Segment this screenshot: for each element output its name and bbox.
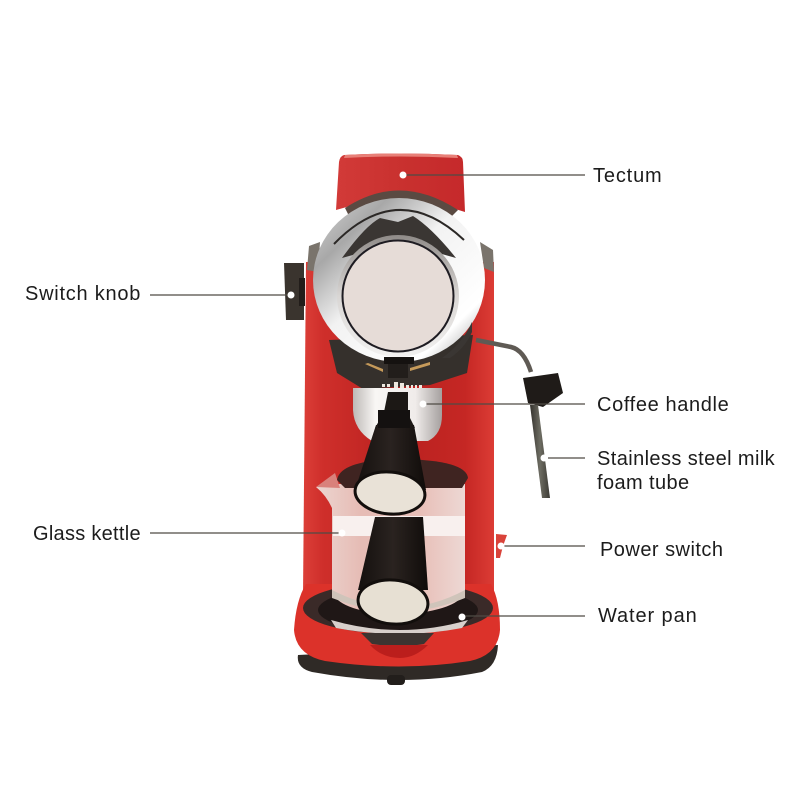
- label: water pan: Water pan: [598, 605, 698, 627]
- label: glass kettle: Glass kettle: [33, 523, 141, 545]
- glass kettle: [316, 459, 468, 615]
- label: stainless steel milk foam tube: foam tube: [597, 472, 690, 494]
- callout lines: [150, 175, 585, 616]
- foam tube grip: [523, 373, 563, 407]
- label: coffee handle: Coffee handle: [597, 394, 729, 416]
- lower handle: [356, 517, 430, 627]
- black base under ring: [329, 335, 473, 389]
- label: tectum: Tectum: [593, 165, 663, 187]
- water pan: [294, 582, 500, 685]
- stainless steel milk foam tube: [530, 405, 550, 498]
- tectum: [336, 154, 465, 218]
- latch and indicators: [365, 357, 430, 388]
- coffee machine: [284, 154, 563, 685]
- steam pipe: [476, 340, 531, 372]
- chrome ring: [313, 198, 485, 362]
- callout dots: [288, 172, 548, 620]
- label: power switch: Power switch: [600, 539, 723, 561]
- chrome brew head: [353, 388, 442, 441]
- spout: [375, 392, 415, 428]
- side shoulders: [307, 242, 494, 272]
- label: switch knob: Switch knob: [25, 283, 141, 305]
- label: stainless steel milk foam tube: Stainless steel milk: [597, 448, 775, 470]
- switch knob: [284, 263, 305, 320]
- machine body: [303, 262, 494, 595]
- upper handle: [353, 410, 427, 517]
- power switch: [496, 534, 507, 558]
